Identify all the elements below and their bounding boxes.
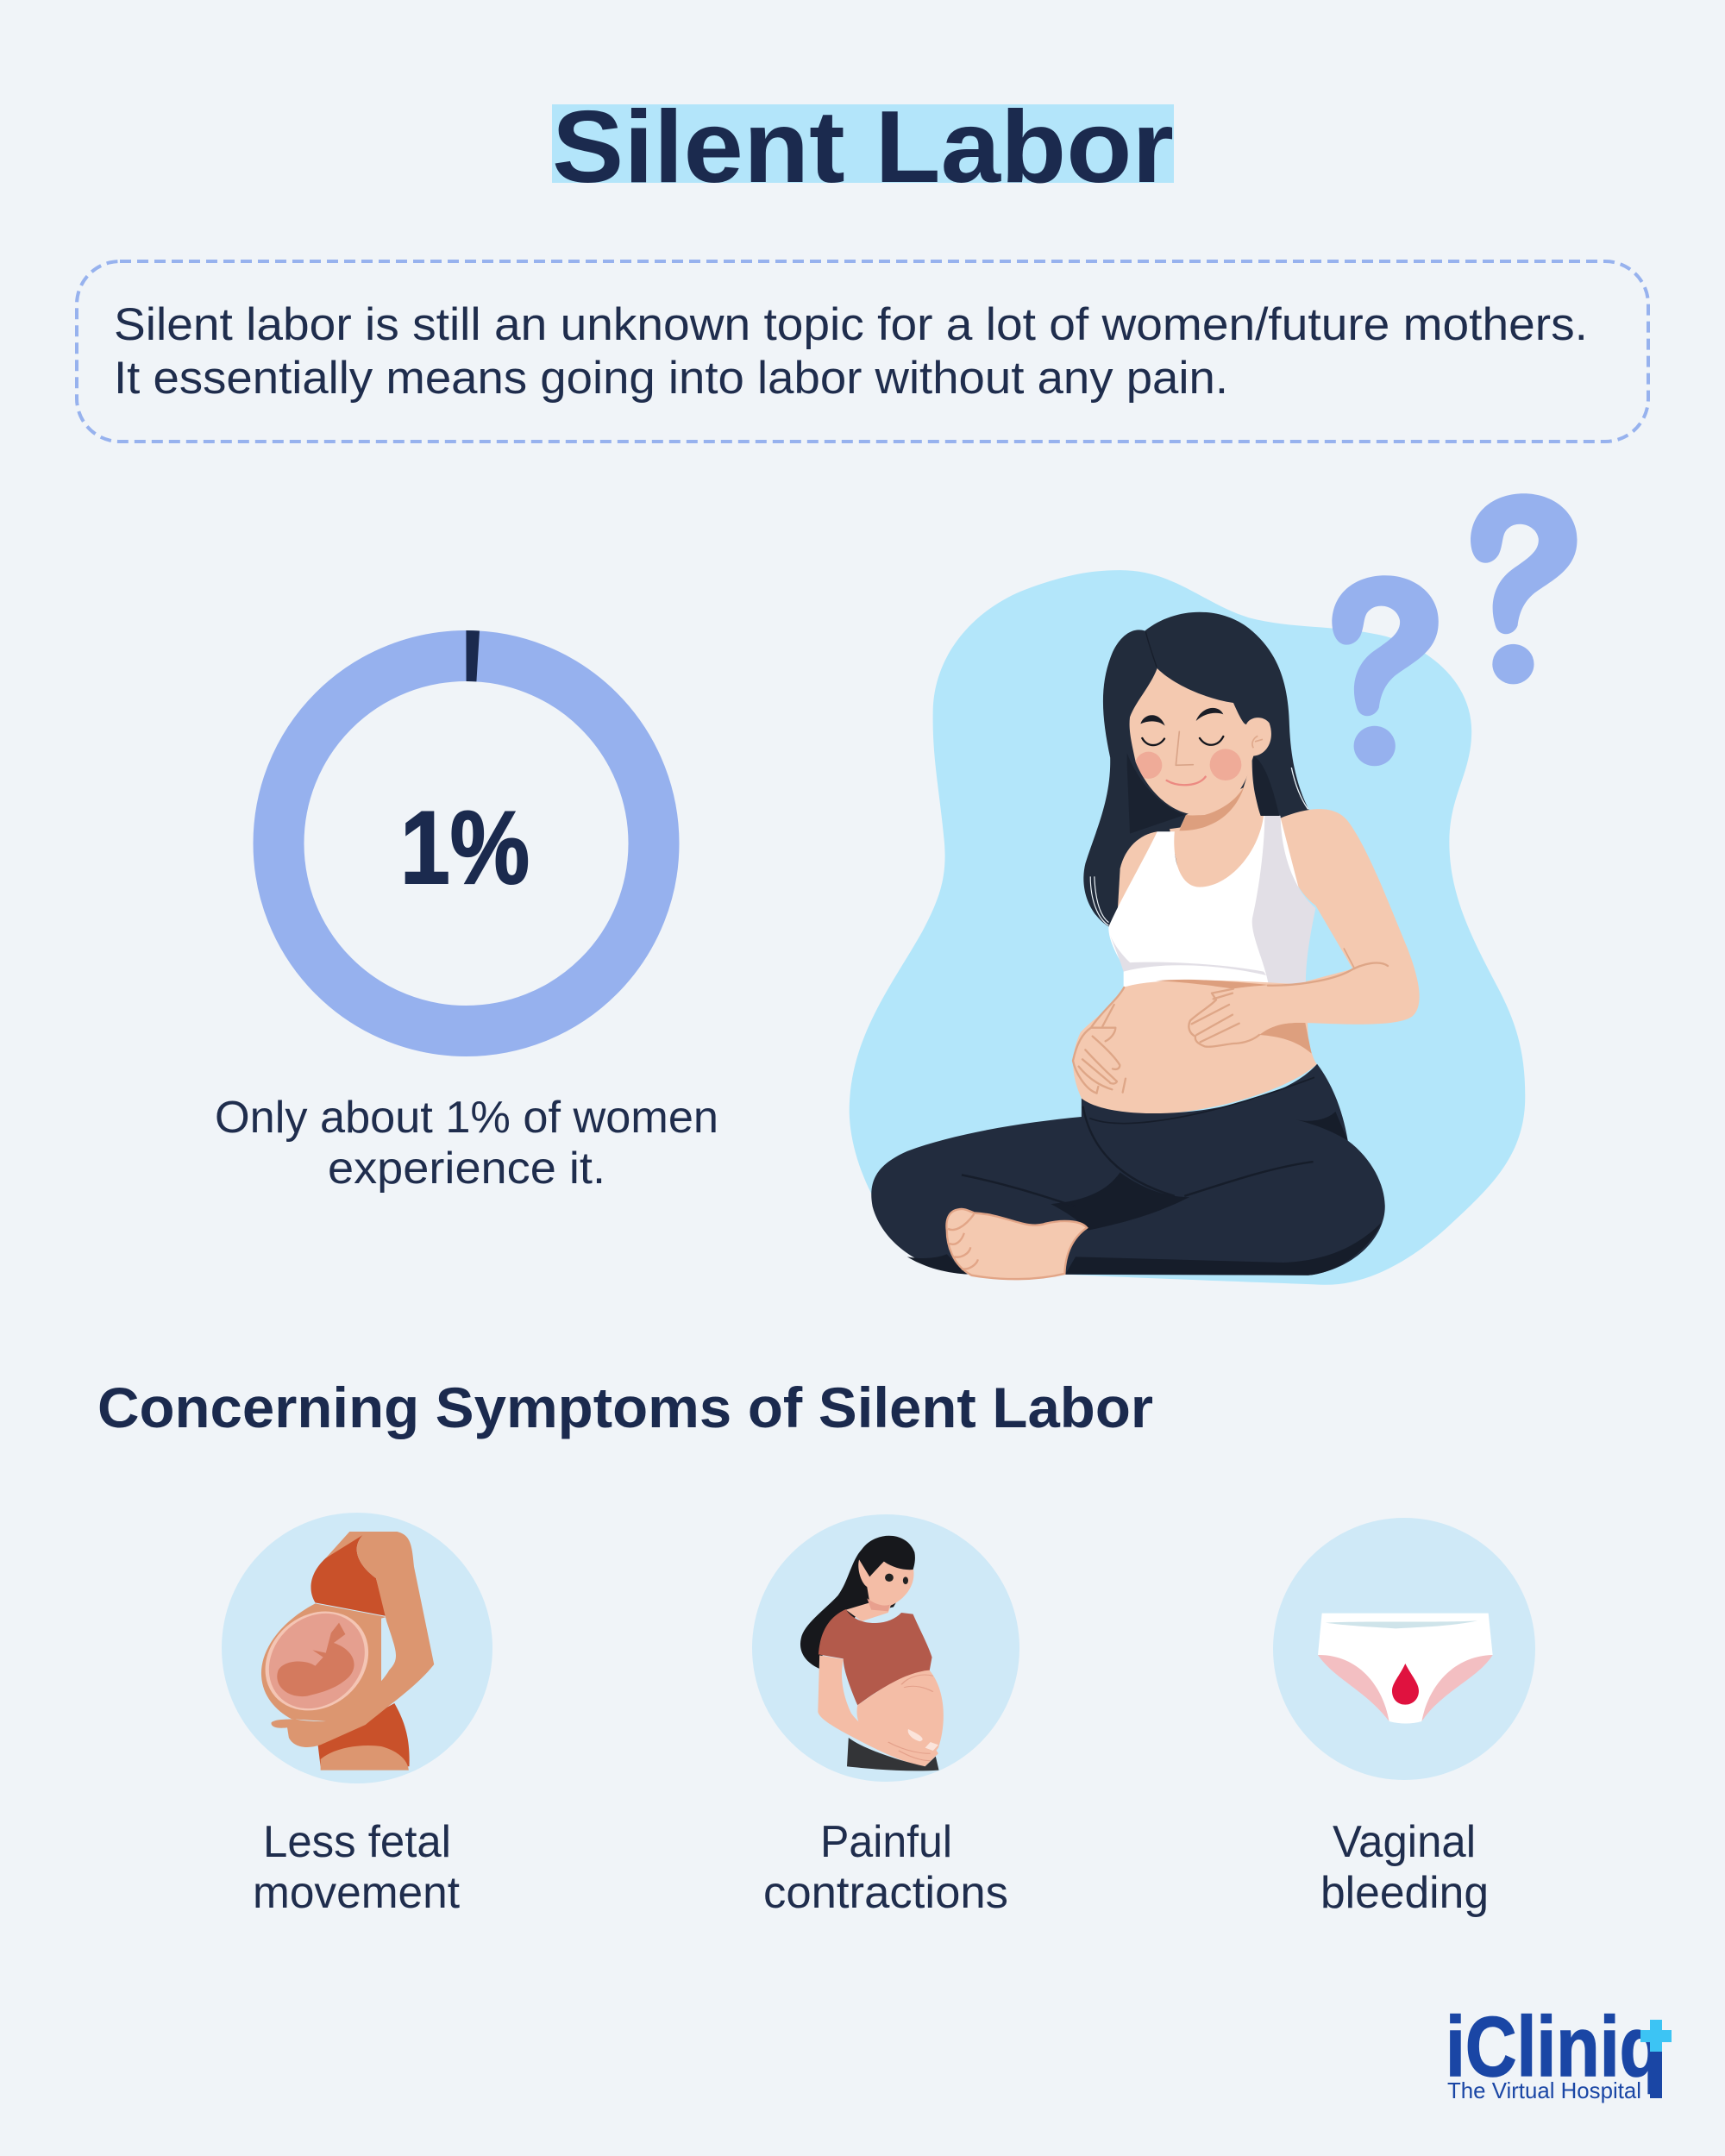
logo plus [1640,2020,1672,2052]
donut caption: experience it. [328,1144,605,1194]
logo tagline: The Virtual Hospital [1447,2078,1641,2103]
label [1320,1817,1489,1918]
cheeks [1135,752,1162,779]
symptom: vaginal bleeding [1273,1518,1535,1918]
neck and chin shadow [1179,761,1264,862]
donut value: 1% [400,790,530,906]
section heading: Concerning Symptoms of Silent Labor [97,1376,1153,1439]
label [253,1817,461,1918]
icon circle [1273,1518,1535,1780]
foot [946,1209,1087,1279]
brows [1140,708,1223,726]
leggings waistband line [1089,1077,1314,1124]
right arm and shoulder [1224,809,1420,1027]
belly [1073,981,1317,1114]
icon circle [222,1513,492,1783]
left shoulder [1118,831,1157,911]
icon: underwear with blood drop [1318,1614,1493,1723]
donut chart: 1 percent [279,655,654,1031]
icon: pregnant body with fetus [256,1532,434,1771]
face [1127,631,1308,834]
right hand [1189,986,1320,1047]
symptom: painful contractions [752,1514,1019,1918]
hair shadows [1127,753,1279,834]
leggings [871,1064,1385,1275]
left hand [1073,1028,1120,1093]
label: Vaginal [1333,1817,1476,1867]
panel: definition callout [77,261,1648,442]
skin [1130,668,1271,815]
hair [1083,612,1309,926]
label: movement [253,1868,461,1918]
icon: woman holding belly [800,1536,944,1771]
label: contractions [763,1868,1008,1918]
label: bleeding [1320,1868,1489,1918]
background blob [850,570,1525,1285]
definition text [114,299,1588,404]
chest skin [1170,816,1264,900]
label [763,1817,1008,1918]
top: side shade [1252,816,1315,985]
definition text: It essentially means going into labor without any pain. [114,353,1228,404]
donut caption [215,1093,718,1194]
ear detail [1252,736,1263,748]
label: Painful [820,1817,952,1867]
label: Less fetal [263,1817,451,1867]
body layers [850,493,1577,1285]
leggings shadows [907,1112,1382,1275]
hands and forearm lines [1073,949,1388,1124]
question mark right [1471,493,1577,684]
symptom: less fetal movement [222,1513,492,1918]
icon circle [752,1514,1019,1782]
illustration: pregnant woman with question marks [850,493,1577,1285]
donut caption: Only about 1% of women [215,1093,718,1143]
question mark left [1332,575,1439,766]
logo: iCliniq: iCliniq [1446,1999,1663,2094]
eyes, nose, mouth [1142,731,1223,785]
top: white crop [1108,816,1303,987]
title: Silent Labor [552,90,1174,204]
definition text: Silent labor is still an unknown topic for a lot of women/future mothers. [114,299,1588,350]
